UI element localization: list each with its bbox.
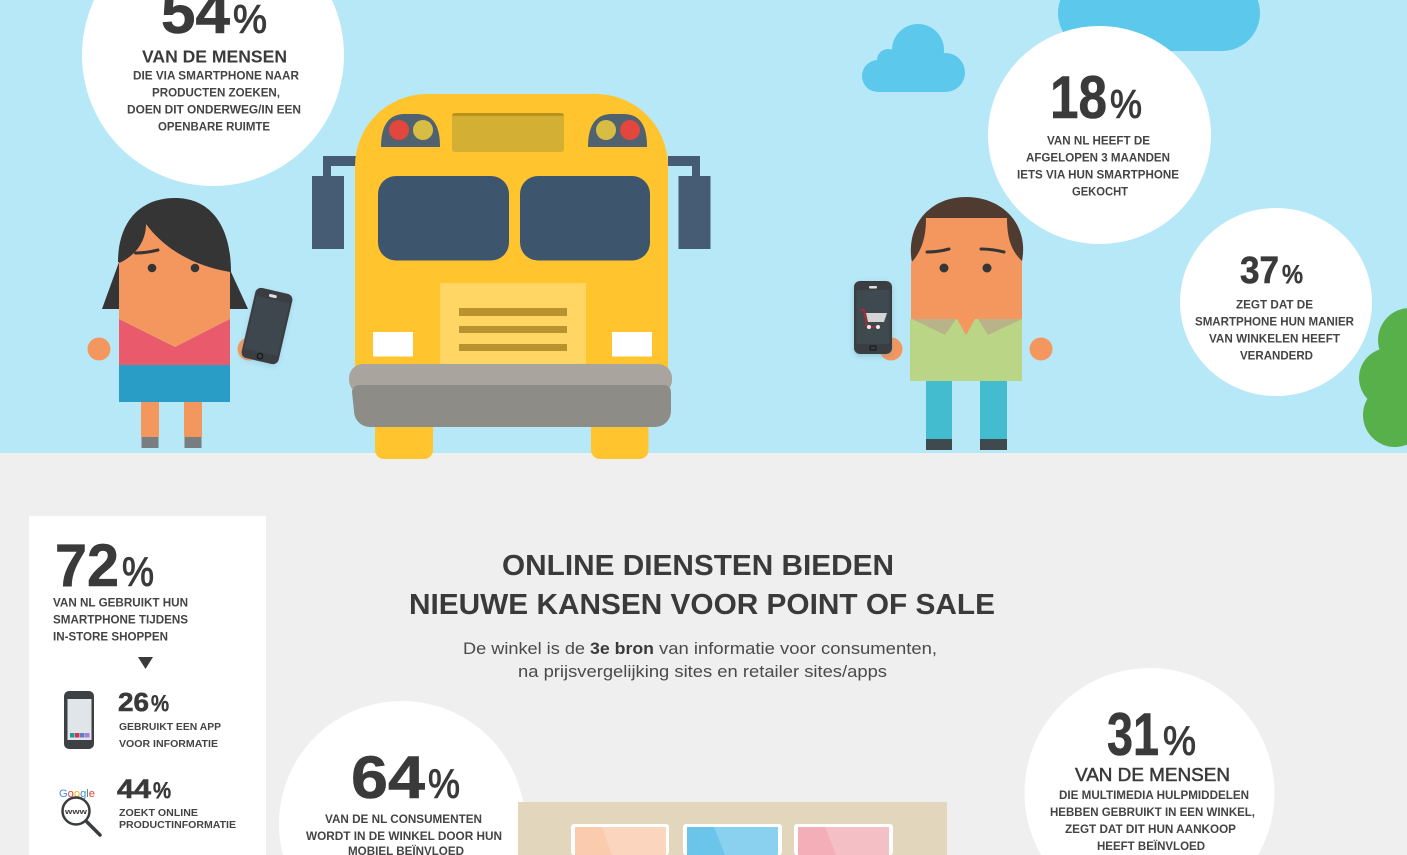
woman top [119,319,230,365]
stat bubble: 31%: HEBBEN GEBRUIKT IN EEN WINKEL, [1050,807,1255,819]
stat bubble: 31% [1024,668,1274,855]
ground background [0,453,1407,855]
man eyes and brows [927,249,1004,272]
school bus [312,94,710,459]
stat bubble: 31%: HEEFT BEÏNVLOED [1097,840,1205,853]
bus headlights [373,332,652,356]
icon: top cloud [1058,0,1260,51]
icon: google magnifier: www [64,809,88,816]
stat bubble: 54% [82,0,344,186]
man character [854,197,1052,450]
main heading [409,550,995,621]
stat: 26% [118,687,221,750]
intro text: na prijsvergelijking sites en retailer sites/apps [518,663,887,681]
stat: 44% [117,774,236,831]
man arms [880,338,1052,360]
stat: 72%: SMARTPHONE TIJDENS [53,614,188,626]
icon: google magnifier [59,788,100,835]
sidebar panel: in-store shopping [29,516,266,855]
woman face [119,224,230,347]
stat bubble: 54%: VAN DE MENSEN [142,46,287,66]
bus mirrors [312,156,710,249]
stat bubble: 64%: WORDT IN DE WINKEL DOOR HUN [306,831,502,843]
stat bubble: 64%: 64 [351,744,426,811]
icon: bush [1359,308,1407,447]
stat: 44%: PRODUCTINFORMATIE [119,820,236,831]
stat: 72%: IN-STORE SHOPPEN [53,632,168,644]
icon: small cloud [862,24,965,92]
icon: down arrow [138,657,153,669]
icon: woman phone [240,287,294,367]
woman arms [88,338,260,360]
stat: 26%: 26 [118,687,149,717]
stat bubble: 37%: VERANDERD [1240,350,1313,362]
stat bubble: 18%: GEKOCHT [1072,186,1128,198]
stat: 72%: 72 [55,532,119,599]
bus top lights [381,114,647,147]
stat bubble: 37% [1180,208,1372,396]
woman character [88,198,294,448]
bus bumper [349,364,672,427]
bus wheels [375,410,648,459]
stat bubble: 18%: 18 [1050,64,1107,131]
stat bubble: 31%: VAN DE MENSEN [1075,765,1230,785]
sky background [0,0,1407,453]
man collar [912,319,1022,335]
icon: phone with apps [64,691,94,749]
stat bubble: 18%: IETS VIA HUN SMARTPHONE [1017,170,1179,182]
stat: 44%: % [153,778,171,803]
woman hair [102,198,248,309]
bus windshield [378,176,650,260]
stat bubble: 37%: VAN WINKELEN HEEFT [1209,334,1340,346]
stat: 26%: GEBRUIKT EEN APP [119,722,221,733]
intro text: De winkel is de [463,640,585,658]
stat: 44%: ZOEKT ONLINE [119,808,198,819]
stat bubble: 64%: VAN DE NL CONSUMENTEN [325,814,482,826]
stat: 72% [53,532,188,644]
stat bubble: 64%: % [428,761,460,807]
stat bubble: 18%: % [1110,83,1142,127]
woman skirt [119,365,230,402]
intro text [463,640,937,681]
intro text: van informatie voor consumenten, [659,640,937,658]
stat bubble: 37%: % [1282,261,1303,289]
stat bubble: 31%: % [1163,718,1196,764]
woman legs [141,402,202,448]
stat: 44%: 44 [117,774,151,804]
man shirt [910,319,1022,381]
main heading: ONLINE DIENSTEN BIEDEN [502,550,894,582]
stat bubble: 31%: 31 [1107,701,1159,768]
stat: 72%: % [122,549,154,595]
icon: man phone with cart [854,281,892,356]
stat bubble: 37%: ZEGT DAT DE [1236,300,1313,312]
main heading: NIEUWE KANSEN VOOR POINT OF SALE [409,589,995,621]
shop screen: blue [683,824,782,855]
bus destination sign [452,113,564,152]
stat bubble: 54%: DOEN DIT ONDERWEG/IN EEN [127,104,301,116]
man legs [926,381,1007,450]
intro text: 3e bron [590,640,654,658]
bus body [355,94,668,390]
woman eyes and brow [136,250,199,272]
stat: 72%: VAN NL GEBRUIKT HUN [53,598,188,610]
bus grille [440,283,586,364]
stat bubble: 18% [988,26,1211,244]
man hair [911,197,1023,263]
stat bubble: 18%: AFGELOPEN 3 MAANDEN [1026,152,1170,164]
shop display [518,802,947,855]
stat: 26%: VOOR INFORMATIE [119,739,218,750]
stat bubble: 54%: DIE VIA SMARTPHONE NAAR [133,70,300,82]
icon: google magnifier: Google [59,788,95,800]
stat bubble: 54%: OPENBARE RUIMTE [158,122,270,134]
stat bubble: 64% [279,701,525,855]
stat bubble: 31%: DIE MULTIMEDIA HULPMIDDELEN [1059,790,1249,802]
shop screen: pink [794,824,893,855]
stat bubble: 31%: ZEGT DAT DIT HUN AANKOOP [1065,824,1236,836]
shop screen: orange [571,824,669,855]
stat bubble: 37%: SMARTPHONE HUN MANIER [1195,316,1355,328]
stat: 26%: % [151,691,169,716]
man face [911,218,1022,340]
stat bubble: 54%: PRODUCTEN ZOEKEN, [152,88,280,100]
stat bubble: 18%: VAN NL HEEFT DE [1047,136,1150,148]
stat bubble: 37%: 37 [1240,250,1279,292]
